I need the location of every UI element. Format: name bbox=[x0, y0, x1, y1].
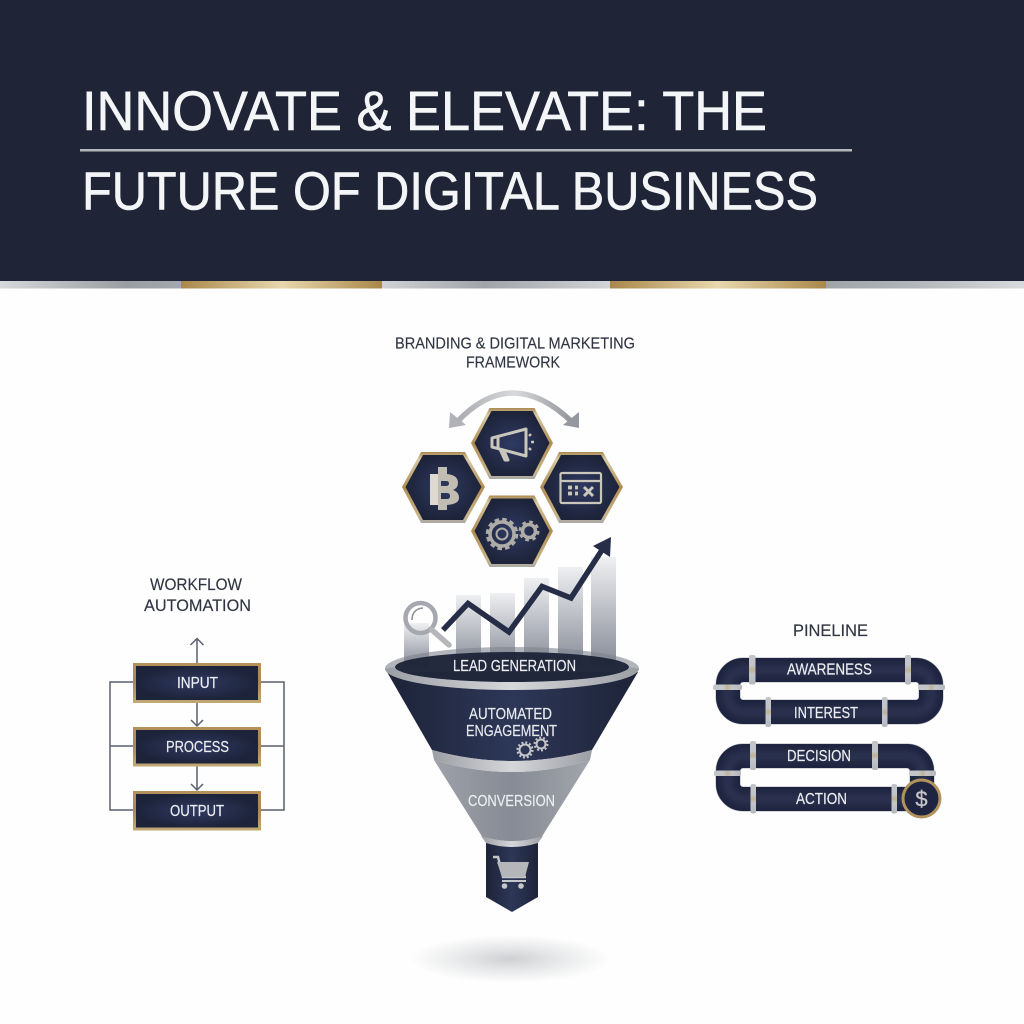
bar chart with trend arrow bbox=[404, 537, 616, 667]
funnel rim front bbox=[385, 667, 639, 690]
heading: branding framework bbox=[395, 336, 635, 372]
lower pipe loop bbox=[728, 756, 922, 799]
funnel bbox=[385, 647, 639, 912]
funnel middle band bbox=[432, 750, 592, 772]
icon: baht symbol bbox=[430, 467, 459, 510]
label: lead generation: LEAD GENERATION bbox=[453, 658, 576, 675]
funnel floor shadow bbox=[410, 935, 610, 983]
title line 2: FUTURE OF DIGITAL BUSINESS bbox=[82, 162, 818, 222]
icon: dollar coin: $ bbox=[915, 786, 928, 812]
hexagon: megaphone bbox=[471, 408, 553, 479]
heading: branding framework: FRAMEWORK bbox=[466, 354, 560, 372]
hexagon: gears bbox=[471, 496, 553, 567]
panel: workflow automation bbox=[110, 576, 284, 830]
header banner bbox=[0, 0, 1024, 281]
icon: magnifier bbox=[406, 603, 449, 645]
connectors and arrows bbox=[110, 638, 284, 810]
hexagon: baht bbox=[402, 452, 485, 523]
funnel lower band bbox=[481, 836, 543, 847]
title divider bbox=[80, 149, 852, 152]
heading: pipeline: PINELINE bbox=[793, 622, 868, 640]
pipe labels: DECISION bbox=[787, 748, 851, 765]
panel: pipeline bbox=[713, 622, 945, 818]
funnel upper cone bbox=[387, 672, 638, 761]
funnel rim rear bbox=[385, 647, 639, 690]
trend line arrow bbox=[443, 537, 611, 632]
heading: branding framework: BRANDING & DIGITAL MARKETING bbox=[395, 336, 635, 352]
upper pipe loop bbox=[728, 670, 931, 712]
box: process bbox=[133, 727, 261, 766]
label: conversion: CONVERSION bbox=[468, 793, 555, 810]
funnel lower cone bbox=[434, 760, 590, 843]
pipe labels: INTEREST bbox=[794, 705, 858, 722]
pipe labels: ACTION bbox=[796, 791, 847, 808]
icon: browser window bbox=[560, 473, 601, 503]
hexagon: browser window bbox=[540, 452, 623, 523]
box: process: PROCESS bbox=[166, 739, 229, 756]
pipe labels: AWARENESS bbox=[787, 662, 872, 678]
icon: shopping cart bbox=[493, 857, 529, 889]
heading: workflow automation: WORKFLOW bbox=[150, 576, 242, 594]
icon: small gears bbox=[518, 738, 548, 758]
pipe labels bbox=[787, 662, 872, 808]
pipe clamps bbox=[713, 655, 945, 814]
funnel spout bbox=[486, 843, 538, 912]
icon: gears bbox=[488, 520, 538, 548]
box: output bbox=[133, 791, 261, 830]
box: input: INPUT bbox=[177, 675, 218, 692]
heading: workflow automation bbox=[144, 576, 251, 615]
icon: dollar coin bbox=[902, 778, 942, 818]
box: output: OUTPUT bbox=[170, 803, 224, 820]
label: automated engagement bbox=[466, 706, 557, 740]
heading: workflow automation: AUTOMATION bbox=[144, 597, 251, 615]
box: input bbox=[133, 663, 261, 703]
title line 1: INNOVATE & ELEVATE: THE bbox=[82, 79, 767, 142]
label: automated engagement: AUTOMATED bbox=[469, 706, 552, 723]
metallic strip bbox=[0, 281, 1024, 288]
cycle arrow bbox=[449, 393, 579, 428]
icon: megaphone bbox=[492, 429, 534, 460]
funnel opening bbox=[395, 652, 629, 682]
label: automated engagement: ENGAGEMENT bbox=[466, 723, 557, 740]
